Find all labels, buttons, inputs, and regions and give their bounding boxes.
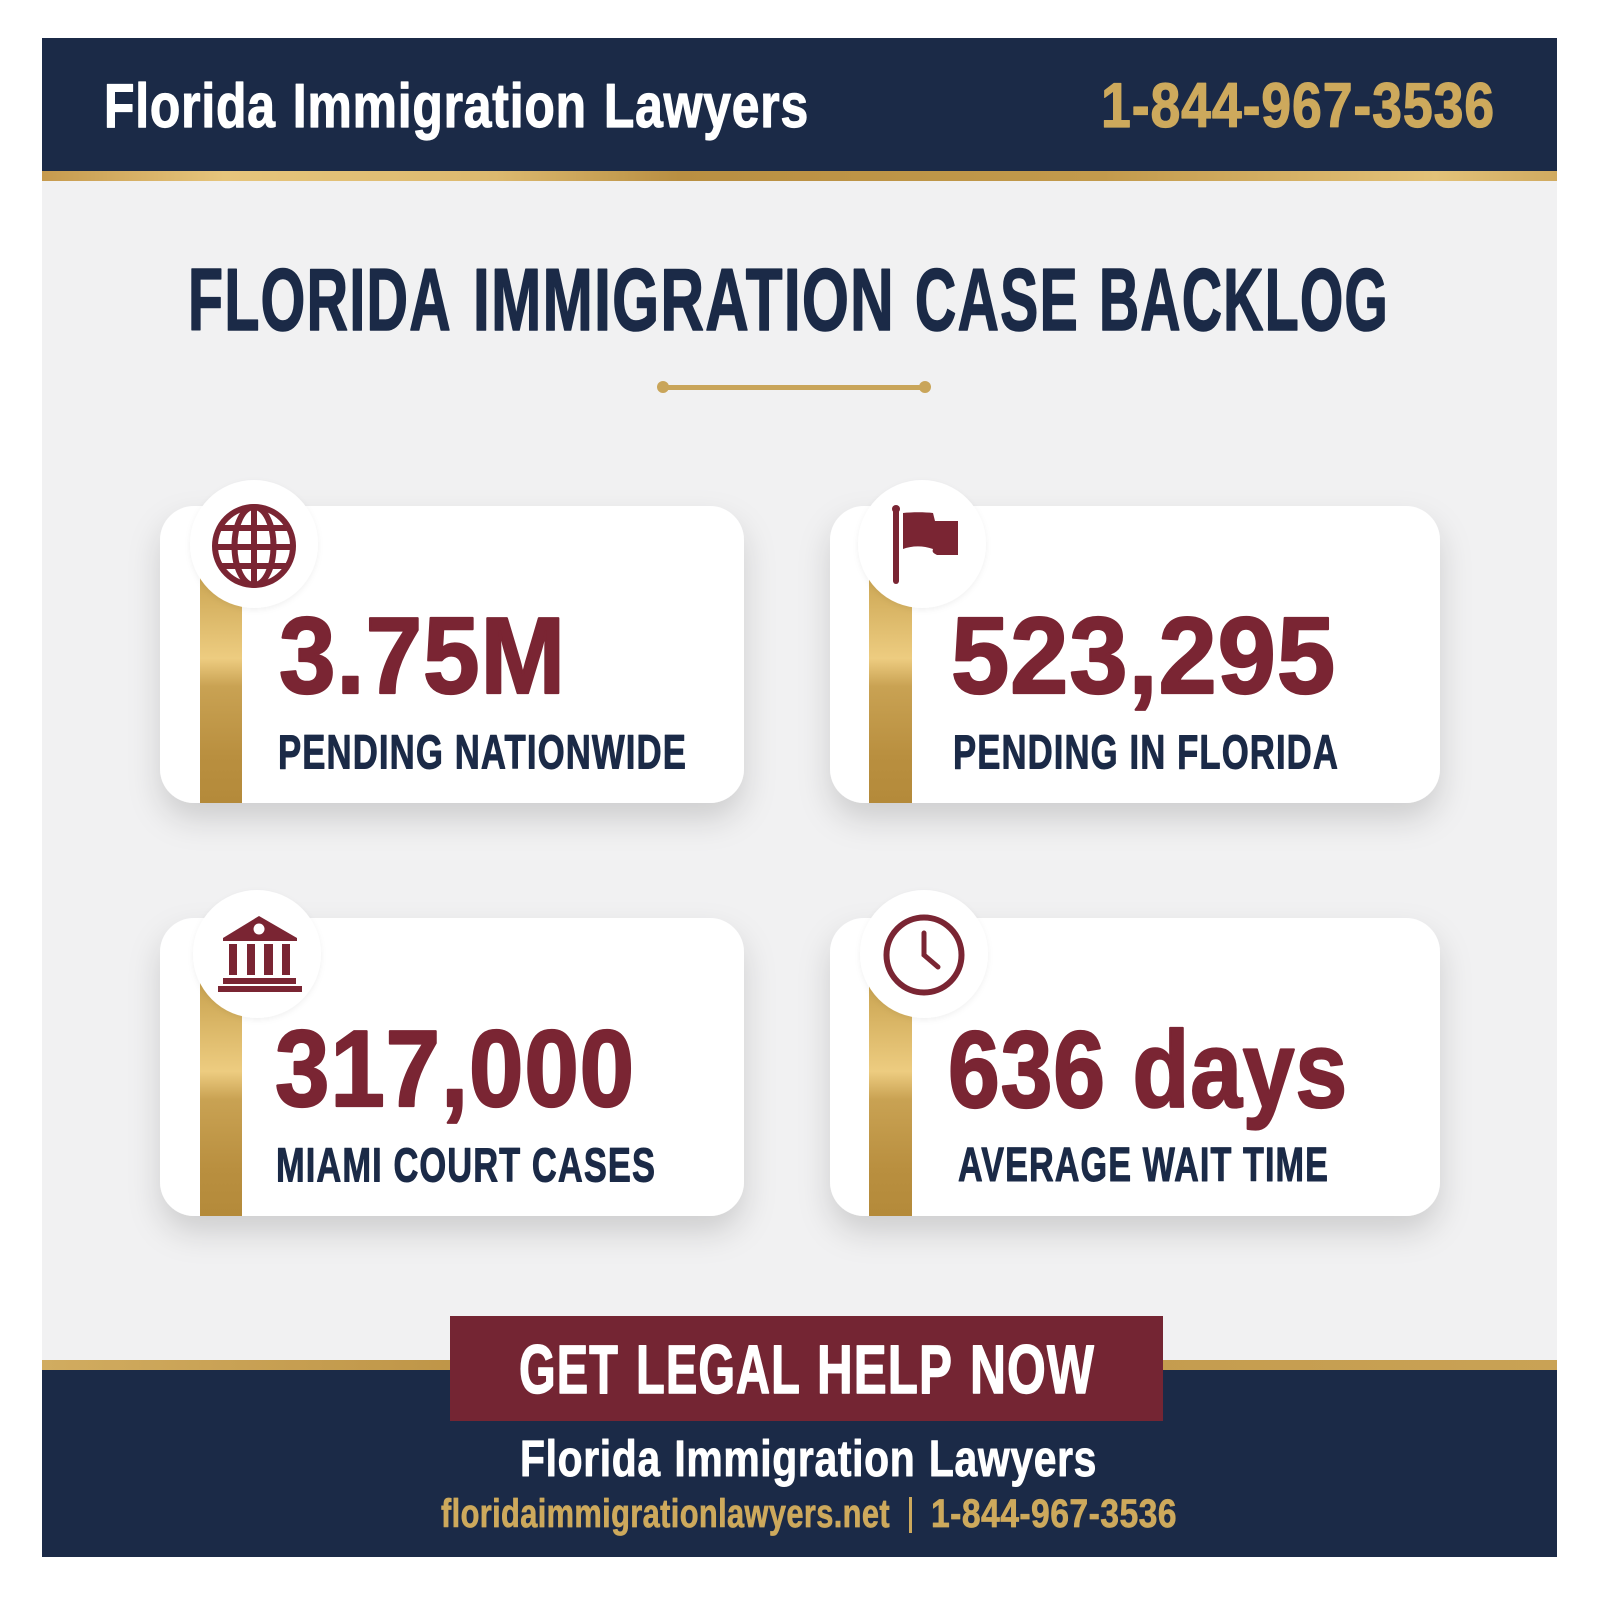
icon: globe [214, 506, 294, 586]
header phone number: 1-844-967-3536 [1101, 71, 1495, 141]
header band [42, 38, 1557, 181]
icon: clock [886, 918, 962, 992]
title divider [657, 381, 931, 393]
label: pending nationwide: PENDING NATIONWIDE [278, 726, 687, 780]
label: average wait time: AVERAGE WAIT TIME [958, 1139, 1329, 1192]
title: CASE [915, 250, 1079, 349]
stat: 636 days: 636 days [948, 1009, 1348, 1131]
panel: Miami court cases [160, 890, 744, 1216]
icon: courthouse [218, 916, 302, 992]
icon: flag [892, 505, 958, 584]
footer website: floridaimmigrationlawyers.net [441, 1492, 890, 1536]
title [188, 250, 1389, 349]
call to action banner: NOW [970, 1331, 1095, 1408]
call to action banner: LEGAL [636, 1331, 801, 1408]
footer separator [909, 1497, 912, 1533]
label: pending in Florida: PENDING IN FLORIDA [953, 726, 1339, 780]
footer firm name: Florida Immigration Lawyers [520, 1430, 1097, 1487]
footer band [42, 1316, 1557, 1557]
panel: pending in Florida [830, 480, 1440, 803]
title: FLORIDA [188, 250, 452, 349]
title: IMMIGRATION [473, 250, 895, 349]
label: Miami court cases: MIAMI COURT CASES [276, 1140, 656, 1192]
stat: 317,000: 317,000 [275, 1008, 635, 1130]
header firm name: Florida Immigration Lawyers [104, 72, 809, 141]
call to action banner: HELP [817, 1331, 953, 1408]
stat: 3.75M: 3.75M [279, 595, 566, 717]
stat: 523,295: 523,295 [951, 595, 1336, 717]
footer phone number: 1-844-967-3536 [931, 1492, 1177, 1536]
panel: average wait time [830, 890, 1440, 1216]
call to action banner: GET [519, 1331, 619, 1408]
title: BACKLOG [1099, 250, 1389, 349]
panel: pending nationwide [160, 480, 744, 803]
call to action banner [450, 1316, 1163, 1421]
